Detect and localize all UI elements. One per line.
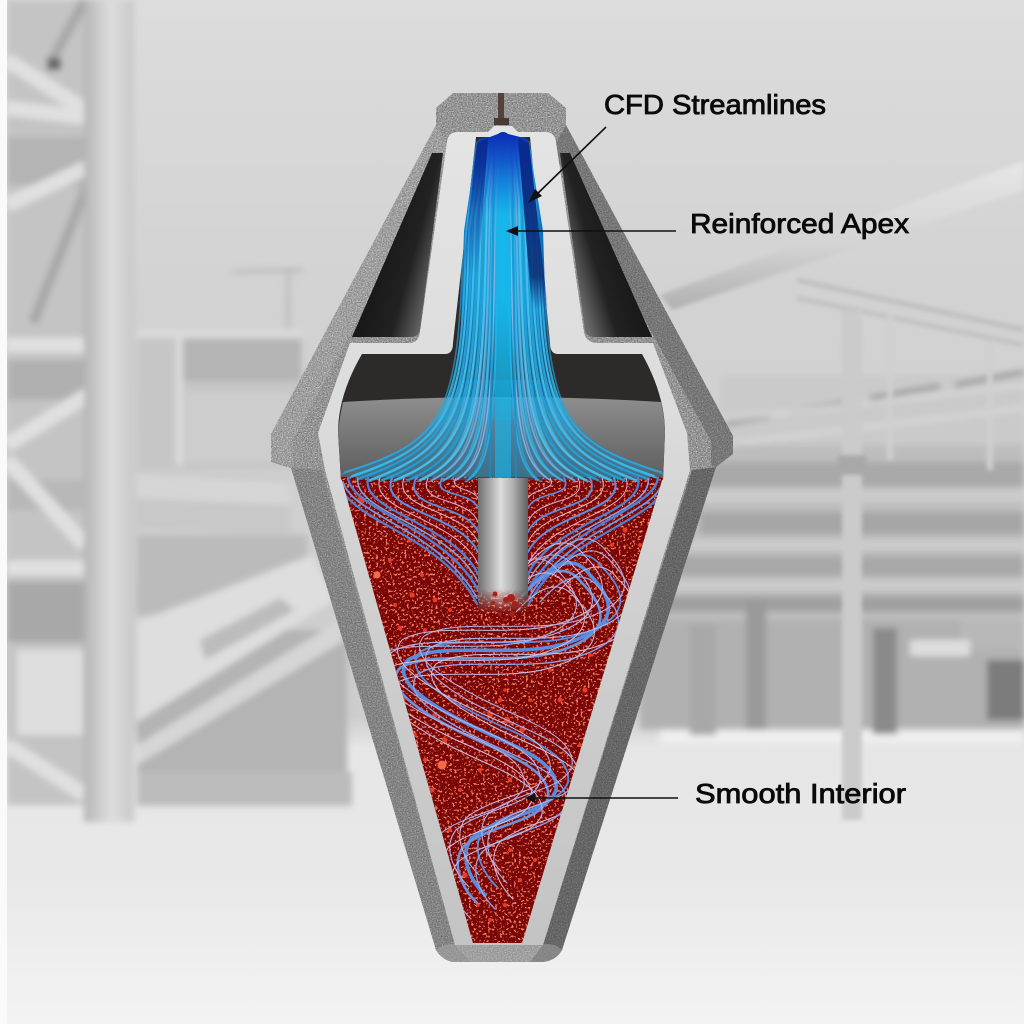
left-side plant structure — [7, 0, 352, 822]
right-side plant structure — [640, 372, 1024, 744]
callout: Smooth Interior — [525, 778, 906, 809]
central feed tube — [478, 478, 528, 622]
callout: Reinforced Apex: Reinforced Apex — [690, 208, 909, 239]
pipe and rails upper right — [660, 161, 1024, 820]
streamlines: curls in red bed — [343, 478, 663, 604]
streamlines: upper fan — [342, 140, 664, 482]
callout: CFD Streamlines — [528, 89, 826, 203]
outer shell — [271, 93, 733, 962]
right upper chamber — [560, 153, 652, 337]
red particle bed — [341, 477, 663, 943]
lower chamber dark upper zone — [338, 137, 665, 480]
callout: Smooth Interior: Smooth Interior — [695, 778, 906, 809]
jet apex dark blue shading — [462, 132, 548, 310]
blue jet base — [355, 132, 650, 480]
light liner interior — [318, 126, 690, 945]
streamlines: lower helical swirl — [372, 539, 636, 919]
panel: cutaway vessel — [271, 93, 733, 962]
callout: CFD Streamlines: CFD Streamlines — [604, 89, 826, 120]
top nozzle rod — [494, 93, 509, 125]
callout: Reinforced Apex — [506, 208, 909, 239]
left upper chamber — [352, 153, 443, 337]
